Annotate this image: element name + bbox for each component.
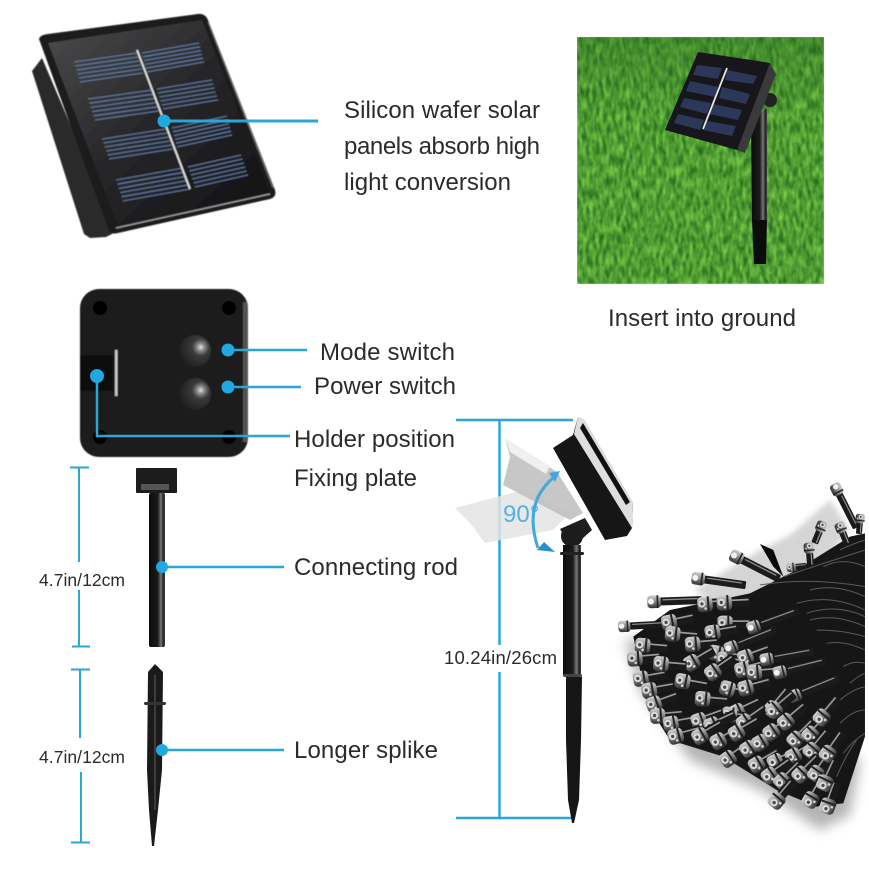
text: solar panel description: Silicon wafer solar: [344, 97, 540, 124]
main bulbs: [627, 594, 849, 816]
rotation arrow 90 degrees: [503, 471, 560, 552]
icon: switch knobs: [179, 335, 211, 410]
label: mode switch: Mode switch: [320, 339, 455, 366]
dimension: spike height: 4.7in/12cm: [39, 747, 125, 767]
wire highlights: [760, 540, 865, 777]
text: solar panel description: panels absorb high: [344, 133, 540, 160]
rotation arrow 90 degrees: 90°: [503, 501, 539, 528]
connecting rod with fixing plate: [136, 468, 177, 647]
dimension: spike height: [39, 669, 125, 842]
text: solar panel description: [344, 97, 540, 196]
upper bulbs shadow: [695, 500, 850, 610]
dimension: connecting rod height: [39, 467, 125, 646]
callout: mode switch pointer: [222, 344, 307, 356]
label: fixing plate: Fixing plate: [294, 465, 417, 492]
label: longer spike: Longer splike: [294, 737, 438, 764]
light cluster shadow: [625, 640, 860, 830]
back of solar box: [80, 289, 248, 457]
dimension: total height: [444, 420, 573, 818]
label: holder position: Holder position: [294, 426, 455, 453]
callout: holder position pointer: [90, 369, 290, 436]
front long bulbs: [723, 605, 841, 721]
solar panel front view: [32, 14, 275, 238]
longer spike: [144, 664, 166, 846]
text: solar panel description: light conversion: [344, 169, 511, 196]
dark wire mass: [633, 533, 865, 807]
callout: connecting rod pointer: [156, 561, 284, 573]
ghost panel positions: [455, 438, 583, 543]
callout: power switch pointer: [222, 380, 301, 394]
label: power switch: Power switch: [314, 373, 456, 400]
callout: spike pointer: [156, 744, 284, 756]
label: connecting rod: Connecting rod: [294, 554, 458, 581]
text: insert into ground: Insert into ground: [608, 305, 796, 332]
assembled stake with panel: [553, 417, 633, 823]
solar cell grid: [74, 43, 248, 201]
outlying bulbs: [618, 481, 865, 632]
callout: solar panel pointer: [158, 114, 318, 128]
dimension: connecting rod height: 4.7in/12cm: [39, 570, 125, 590]
photo: stake in grass: [577, 37, 824, 284]
dimension: total height: 10.24in/26cm: [444, 647, 557, 668]
string lights cluster: [618, 481, 865, 830]
